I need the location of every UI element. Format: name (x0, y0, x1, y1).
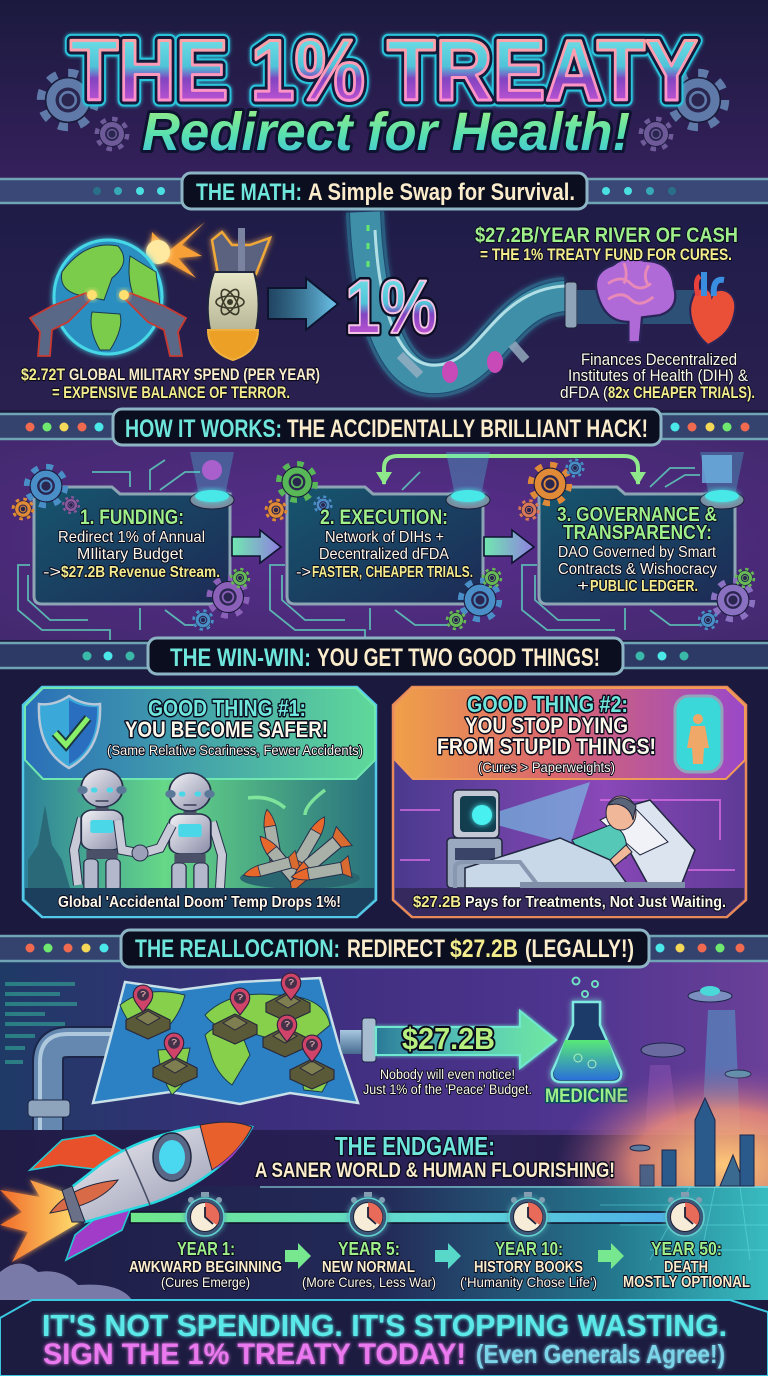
gears: title decoration (42, 74, 724, 148)
panel: good thing 1: Global 'Accidental Doom' Temp Drops 1%! (58, 894, 341, 911)
milestone: year 10: HISTORY BOOKS (474, 1259, 583, 1276)
banner: reallocation: (LEGALLY!) (525, 935, 634, 963)
grid floor (600, 1187, 768, 1260)
UFOs (641, 986, 751, 1130)
panel: funding: 1. FUNDING: (80, 506, 184, 529)
icon: flask (552, 978, 621, 1082)
panel: funding: $27.2B Revenue Stream. (61, 564, 220, 581)
panel: good thing 2: $27.2B (413, 894, 461, 911)
banner: reallocation (0, 930, 768, 967)
endgame title: THE ENDGAME: (335, 1131, 495, 1161)
banner: how it works (0, 409, 768, 445)
patient in bed (455, 796, 695, 889)
endgame title: A SANER WORLD & HUMAN FLOURISHING! (255, 1159, 615, 1182)
arrow: execution to governance (484, 530, 534, 563)
icon: bomb (208, 228, 270, 360)
horizon glow line (260, 1186, 768, 1188)
how it works background (0, 440, 768, 640)
data columns (5, 982, 77, 1064)
text: finances DIH: Institutes of Health (DIH) & (568, 366, 749, 385)
pipe: outgoing (340, 1018, 376, 1062)
cloud (0, 1264, 132, 1300)
subtitle: Redirect for Health! (142, 102, 630, 162)
footer call to action: IT'S NOT SPENDING. IT'S STOPPING WASTING. (42, 1308, 727, 1343)
text: nobody will notice: Just 1% of the 'Peace' Budget. (363, 1081, 532, 1097)
title: THE 1% TREATY (70, 23, 698, 119)
clock: year 10 (509, 1192, 547, 1236)
panel: good thing 2: FROM STUPID THINGS! (437, 734, 656, 759)
title: THE 1% TREATY (70, 23, 698, 119)
title: THE 1% TREATY (70, 23, 698, 119)
arrow: year 1 to 5 (285, 1243, 311, 1269)
panel: funding (14, 452, 248, 629)
arrow: feedback loop (384, 456, 638, 484)
cuff: pipe end (565, 282, 577, 328)
panel: execution: FASTER, CHEAPER TRIALS. (312, 564, 473, 581)
milestone: year 5: NEW NORMAL (322, 1259, 415, 1276)
milestone: year 1: (Cures Emerge) (161, 1274, 250, 1290)
robots shaking hands (74, 769, 222, 895)
banner: the math: A Simple Swap for Survival. (308, 179, 575, 206)
beam: pipe to organs (577, 290, 727, 324)
scene backdrop: silhouette (28, 805, 70, 888)
text: medicine: MEDICINE (545, 1086, 628, 1107)
footer panel (0, 1300, 768, 1376)
banner: reallocation: $27.2B (450, 935, 518, 963)
panel: execution: -> (296, 564, 311, 581)
panel: execution: Network of DIHs + (325, 529, 444, 546)
endgame title (255, 1131, 615, 1182)
caption bar 1 (25, 888, 374, 916)
panel: good thing 1: YOU BECOME SAFER! (125, 717, 328, 742)
icon: globe with ray guns and explosion (30, 222, 205, 356)
text: nobody will notice (363, 1066, 532, 1097)
neon circuit lines (400, 800, 735, 870)
milestone: year 50: YEAR 50: (651, 1239, 722, 1259)
text: finances DIH: Finances Decentralized (581, 350, 737, 369)
panel: good thing 1 (23, 687, 376, 917)
footer call to action: SIGN THE 1% TREATY TODAY! (43, 1338, 466, 1371)
panel: good thing 2: GOOD THING #2: (467, 691, 628, 717)
clock: year 5 (349, 1192, 387, 1236)
banner: win-win (0, 638, 768, 674)
milestone: year 50 (623, 1239, 750, 1291)
title section background (0, 0, 768, 178)
reallocation background (0, 960, 768, 1135)
panel: execution (266, 452, 500, 628)
computer monitor and console (447, 790, 502, 888)
arrow: to medicine (376, 1011, 556, 1068)
world map with military bases (93, 973, 358, 1104)
text: nobody will notice: Nobody will even notice! (380, 1066, 515, 1082)
math section background (0, 205, 768, 410)
banner: the math (0, 173, 768, 209)
caption bar 2 (395, 888, 744, 916)
icon: scan tube (675, 696, 722, 772)
panel: governance: PUBLIC LEDGER. (590, 578, 698, 595)
panel: execution: Decentralized dFDA (319, 546, 449, 563)
win-win background (0, 668, 768, 938)
endgame background (0, 1130, 768, 1300)
milestone: year 10: YEAR 10: (495, 1239, 563, 1259)
pipe: incoming (28, 1034, 120, 1130)
milestone: year 5: YEAR 5: (338, 1239, 400, 1259)
milestone: year 5 (302, 1239, 436, 1290)
banner: reallocation: THE REALLOCATION: (135, 935, 340, 963)
panel: governance: TRANSPARENCY: (563, 522, 712, 544)
banner: reallocation: REDIRECT (347, 935, 445, 963)
city skyline (630, 1098, 754, 1186)
text: military spend (21, 365, 320, 402)
timeline line (130, 1212, 700, 1223)
sunset glow (555, 1065, 768, 1265)
icon: brain (596, 258, 675, 342)
milestone: year 1: AWKWARD BEGINNING (129, 1259, 282, 1276)
panel: governance (520, 452, 754, 628)
panel: good thing 2: Pays for Treatments, Not Just Waiting. (465, 894, 726, 911)
footer call to action: (Even Generals Agree!) (476, 1339, 725, 1369)
panel: governance: Contracts & Wishocracy (558, 561, 717, 578)
panel: governance: DAO Governed by Smart (558, 544, 716, 561)
panel: execution: 2. EXECUTION: (320, 506, 448, 529)
arrow: year 5 to 10 (435, 1243, 461, 1269)
milestone: year 5: (More Cures, Less War) (302, 1274, 436, 1290)
milestone: year 10: ('Humanity Chose Life') (460, 1274, 597, 1290)
text: military spend: = EXPENSIVE BALANCE OF TERROR. (52, 383, 290, 402)
text: military spend: GLOBAL MILITARY SPEND (PER YEAR) (69, 365, 320, 384)
text: finances DIH (560, 350, 755, 402)
text: finances DIH: dFDA ( (560, 383, 608, 402)
panel: funding: MIlitary Budget (77, 546, 184, 563)
circuit traces (18, 460, 705, 640)
horizon floor (0, 1186, 768, 1300)
arrow: funding to execution (232, 530, 281, 563)
arrow heads: feedback loop (376, 472, 646, 485)
text: 27.2B: $27.2B (402, 1021, 495, 1056)
one percent: 1% (345, 265, 437, 350)
pipe: river of cash (365, 212, 565, 383)
banner: the math: THE MATH: (196, 179, 302, 206)
beam (497, 782, 590, 845)
milestone: year 10 (460, 1239, 597, 1290)
clock: year 1 (186, 1192, 224, 1236)
panel: good thing 2: YOU STOP DYING (465, 713, 628, 738)
panel: governance: 3. GOVERNANCE & (557, 504, 717, 526)
arrow: to one percent (268, 278, 338, 330)
panel: good thing 2 (393, 687, 746, 917)
panel: good thing 1: (Same Relative Scariness, Fewer Accidents) (107, 742, 363, 758)
banner: win-win: THE WIN-WIN: (170, 644, 311, 672)
one percent: 1% (345, 265, 437, 350)
panel: governance: + (577, 578, 589, 595)
rocket (30, 1122, 252, 1260)
panel: good thing 2: (Cures > Paperweights) (478, 759, 615, 775)
banner: how it works: HOW IT WORKS: (125, 415, 282, 443)
panel: good thing 1: GOOD THING #1: (148, 695, 306, 721)
arrow: year 10 to 50 (598, 1243, 624, 1269)
text: military spend: $2.72T (21, 365, 66, 384)
milestone: year 1: YEAR 1: (177, 1239, 235, 1259)
panel: funding: -> (43, 564, 61, 581)
panel: funding: Redirect 1% of Annual (58, 529, 205, 546)
banner: how it works: THE ACCIDENTALLY BRILLIANT HACK! (287, 415, 648, 443)
missile pile (240, 808, 360, 892)
footer call to action (42, 1308, 727, 1371)
recycle arrows (248, 790, 325, 815)
milestone: year 1 (129, 1239, 282, 1290)
icon: heart (690, 272, 735, 345)
milestone: year 50: DEATH (664, 1259, 708, 1276)
banner: win-win: YOU GET TWO GOOD THINGS! (317, 644, 600, 672)
icon: shield (39, 696, 100, 768)
text: river of cash (475, 224, 738, 264)
flame (0, 1180, 80, 1262)
clock: year 50 (666, 1192, 704, 1236)
